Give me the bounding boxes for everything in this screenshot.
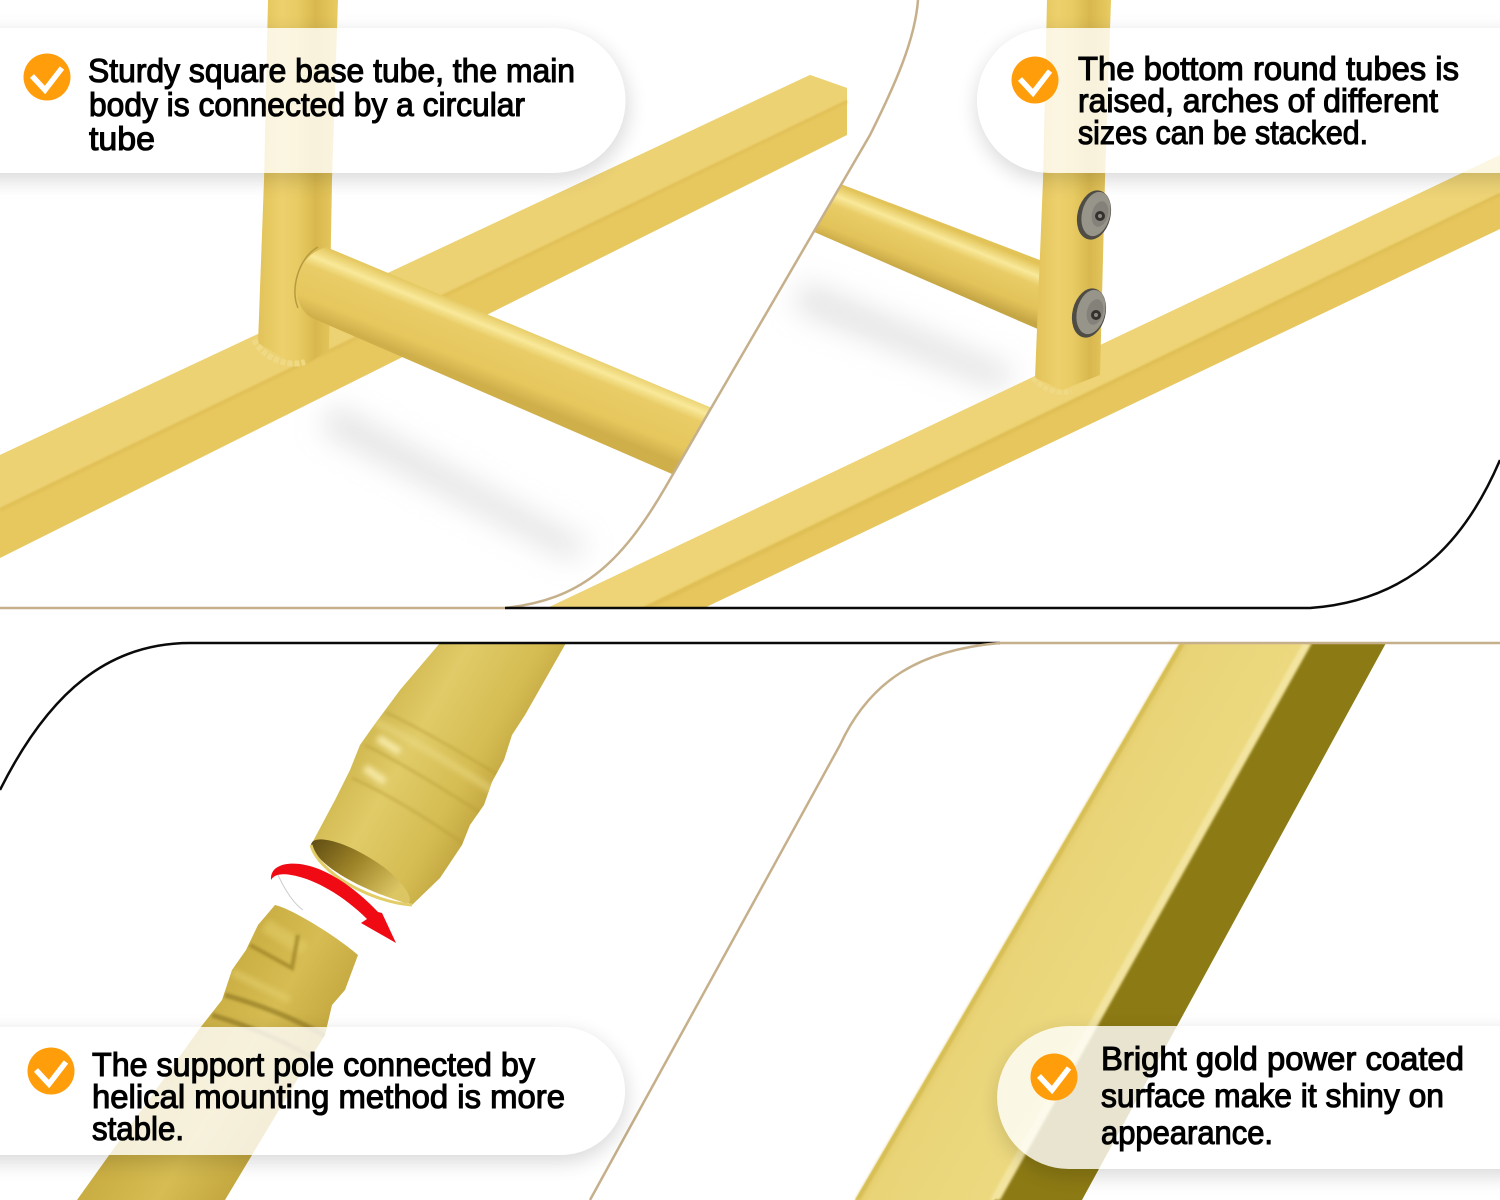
callout text: appearance. (1101, 1114, 1273, 1151)
panel: raised round tubes (550, 0, 1500, 607)
callout text (1078, 50, 1459, 151)
bolt: lower (1072, 288, 1106, 338)
tan curve top (0, 0, 918, 608)
tube opening (311, 839, 410, 903)
callout text: sizes can be stacked. (1078, 114, 1368, 151)
weld seam (1033, 378, 1072, 392)
callout text: The bottom round tubes is (1078, 50, 1459, 87)
callout: sturdy base tube (0, 28, 626, 173)
vertical post (258, 0, 338, 368)
bolt: upper (1076, 190, 1112, 240)
callout text: stable. (92, 1110, 184, 1147)
square tube closeup (855, 643, 1386, 1200)
square base tube (0, 75, 847, 558)
callout text (92, 1046, 565, 1147)
round connecting tube (295, 247, 712, 474)
icon: check badge (1030, 1054, 1078, 1100)
icon: check badge (1012, 56, 1058, 104)
black curve bottom (0, 643, 1000, 790)
tan curve bottom (590, 643, 1500, 1200)
upper threaded pole (310, 644, 566, 906)
callout text: raised, arches of different (1078, 82, 1438, 119)
rear round tube (814, 184, 1040, 329)
callout text: body is connected by a circular (89, 86, 525, 123)
callout text (1101, 1040, 1464, 1151)
weld seam (254, 340, 305, 364)
panel: square base tube (0, 0, 847, 560)
lower threaded pole (70, 900, 370, 1200)
callout text: helical mounting method is more (92, 1078, 565, 1115)
icon: check badge (24, 54, 70, 100)
square base tube (550, 155, 1500, 607)
panel: helical connection (70, 640, 580, 1200)
callout text: Sturdy square base tube, the main (88, 52, 575, 89)
callout: gold surface (997, 1026, 1500, 1169)
panel: gold surface (855, 643, 1386, 1200)
callout: helical mounting (0, 1027, 625, 1155)
floor shadow (320, 405, 590, 560)
callout text (88, 52, 575, 157)
callout text: surface make it shiny on (1101, 1077, 1444, 1114)
rotation arrow (271, 864, 396, 943)
vertical post (1035, 0, 1111, 390)
black curve top (505, 460, 1500, 608)
floor shadow (795, 281, 1015, 390)
callout: raised round tubes (977, 28, 1500, 173)
callout text: tube (89, 120, 155, 157)
icon: check badge (28, 1048, 74, 1094)
callout text: The support pole connected by (92, 1046, 535, 1083)
callout text: Bright gold power coated (1101, 1040, 1464, 1077)
